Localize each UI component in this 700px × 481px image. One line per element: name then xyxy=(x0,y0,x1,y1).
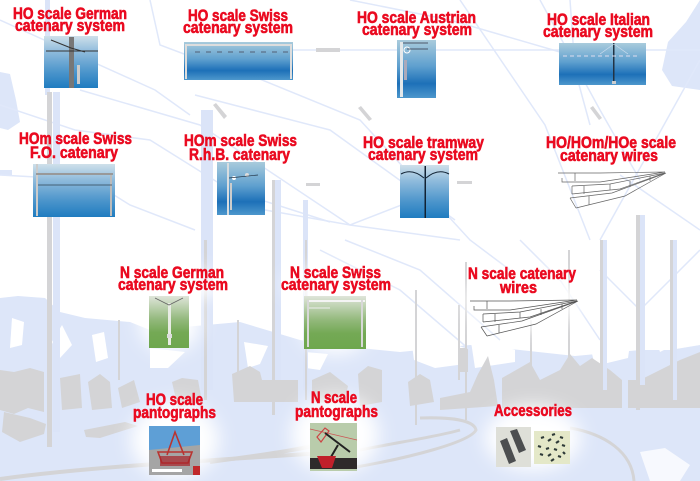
panel: HO scale Swiss catenary system xyxy=(183,7,293,80)
heading xyxy=(13,5,127,35)
thumbnail xyxy=(33,164,115,217)
thumbnail xyxy=(44,36,98,88)
heading: catenary system xyxy=(15,17,125,35)
heading: HOm scale Swiss xyxy=(19,130,132,148)
heading xyxy=(546,134,676,165)
heading: HO scale German xyxy=(13,5,127,23)
heading xyxy=(183,7,293,37)
heading: catenary system xyxy=(362,21,472,39)
heading xyxy=(363,134,485,164)
heading: N scale German xyxy=(120,264,224,282)
thumbnail xyxy=(400,165,449,218)
heading: HOm scale Swiss xyxy=(184,132,297,150)
panel: N scale German catenary system xyxy=(118,264,228,348)
heading: R.h.B. catenary xyxy=(189,146,291,164)
panel: HO scale German catenary system xyxy=(13,5,127,88)
heading: HO scale Italian xyxy=(547,11,650,29)
panel: N scale Swiss catenary system xyxy=(281,264,391,349)
wires icon xyxy=(470,300,578,336)
heading: catenary system xyxy=(118,276,228,294)
lower tree line xyxy=(0,348,700,442)
heading: HO scale Austrian xyxy=(357,9,476,27)
heading xyxy=(281,264,391,294)
heading xyxy=(543,11,653,41)
heading: F.O. catenary xyxy=(30,144,119,162)
thumbnail xyxy=(397,40,436,98)
heading: catenary system xyxy=(281,276,391,294)
heading: HO/HOm/HOe scale xyxy=(546,134,676,152)
heading xyxy=(468,265,577,297)
heading: HO scale xyxy=(146,391,203,409)
heading: catenary system xyxy=(368,146,478,164)
heading xyxy=(295,389,378,421)
heading xyxy=(357,9,476,39)
panel: HOm scale Swiss F.O. catenary xyxy=(19,130,132,217)
thumbnail xyxy=(559,43,646,85)
heading xyxy=(133,391,216,422)
heading: catenary wires xyxy=(560,147,658,165)
heading: pantographs xyxy=(133,404,216,422)
panel: HO scale tramway catenary system xyxy=(363,134,485,218)
thumbnail xyxy=(310,423,357,471)
thumbnail xyxy=(304,296,366,349)
panel: N scale pantographs xyxy=(295,389,378,471)
heading xyxy=(19,130,132,162)
panel: HO scale Italian catenary system xyxy=(543,11,653,85)
heading: N scale xyxy=(311,389,357,407)
heading xyxy=(184,132,297,164)
thumbnail: small clips xyxy=(534,431,570,464)
heading: HO scale tramway xyxy=(363,134,485,152)
heading: catenary system xyxy=(543,23,653,41)
heading: N scale Swiss xyxy=(290,264,381,282)
heading: wires xyxy=(499,279,537,297)
thumbnail xyxy=(184,42,293,80)
heading: Accessories xyxy=(494,402,572,420)
thumbnail xyxy=(149,426,200,475)
panel: HO scale Austrian catenary system xyxy=(357,9,476,98)
heading: N scale catenary xyxy=(468,265,577,283)
wires icon xyxy=(558,172,666,208)
heading xyxy=(118,264,228,294)
panel: accessories xyxy=(494,402,572,467)
heading: HO scale Swiss xyxy=(188,7,288,25)
panel: HO/HOm/HOe scale catenary wires xyxy=(546,134,676,208)
thumbnail: connector plates xyxy=(496,427,531,467)
thumbnail xyxy=(149,296,189,348)
heading: catenary system xyxy=(183,19,293,37)
panel: N scale catenary wires xyxy=(468,265,578,336)
panel: HO scale pantographs xyxy=(133,391,216,475)
thumbnail xyxy=(217,162,265,215)
panel: HOm scale Swiss R.h.B. catenary xyxy=(184,132,297,215)
background insulators xyxy=(213,48,602,186)
overhead wires xyxy=(0,0,700,350)
white glows behind labels xyxy=(124,269,581,478)
heading: pantographs xyxy=(295,403,378,421)
track curves xyxy=(0,418,690,481)
